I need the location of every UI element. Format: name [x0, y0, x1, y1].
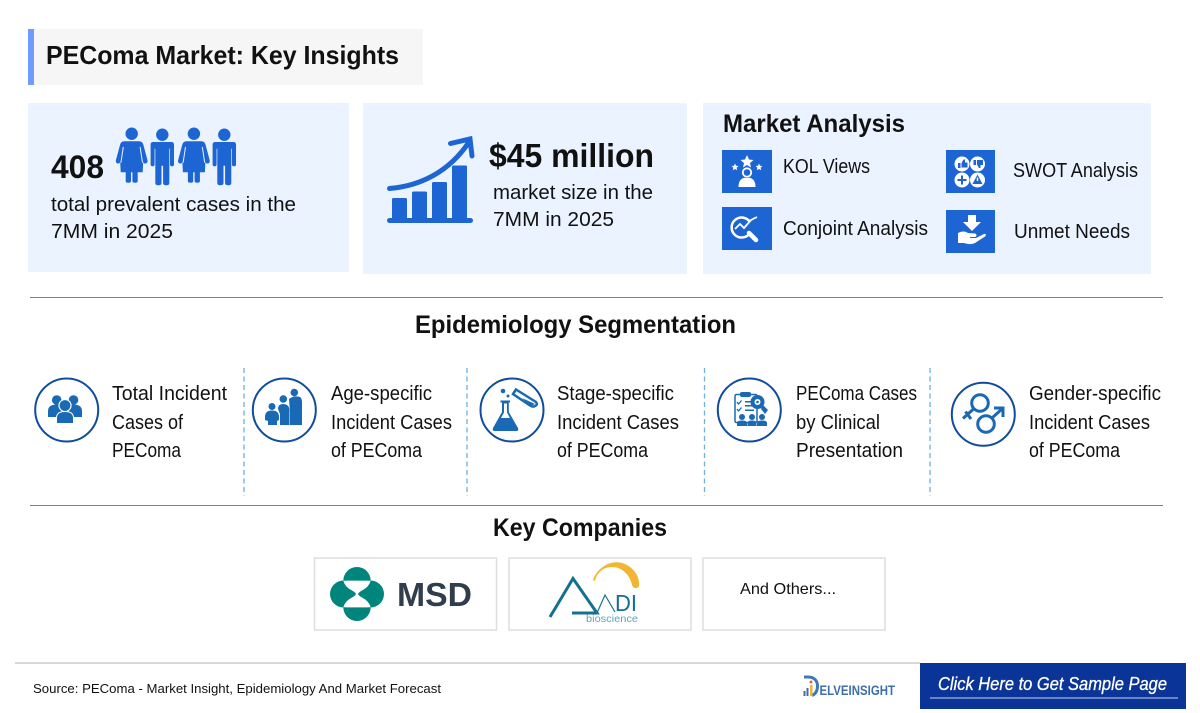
panel: market size — [363, 103, 687, 274]
text: market size description: market size in the — [493, 182, 653, 204]
icon: unmet needs — [946, 210, 995, 253]
button: get sample page: Click Here to Get Sample Page — [938, 674, 1167, 694]
text — [331, 383, 452, 462]
logo card: MSD: MSD — [397, 576, 472, 613]
text: of PEComa — [331, 440, 423, 462]
text: Stage-specific — [557, 383, 674, 405]
label: conjoint analysis: Conjoint Analysis — [783, 218, 928, 240]
text: prevalent cases description: total prevalent cases in the — [51, 194, 296, 216]
text: PEComa — [112, 440, 182, 462]
icon: KOL views — [722, 150, 772, 193]
text — [112, 383, 227, 462]
button: get sample page — [920, 663, 1186, 709]
text: of PEComa — [1029, 440, 1121, 462]
text: prevalent cases description: 7MM in 2025 — [51, 221, 173, 243]
segment: clinical presentation — [718, 378, 917, 462]
text: Total Incident — [112, 383, 227, 405]
panel: prevalent cases — [28, 103, 349, 272]
text: market size description — [493, 182, 653, 231]
logo card: and others: And Others... — [740, 581, 836, 598]
text: of PEComa — [557, 440, 649, 462]
label: unmet needs: Unmet Needs — [1014, 221, 1130, 243]
icon: age groups — [253, 378, 316, 442]
icon: people — [116, 128, 236, 185]
text: Presentation — [796, 440, 903, 462]
icon: conjoint analysis — [722, 207, 772, 250]
icon: growth chart — [387, 139, 473, 223]
source note: Source: PEComa - Market Insight, Epidemiology And Market Forecast — [33, 681, 441, 696]
icon: group of people — [35, 378, 98, 442]
heading: key companies: Key Companies — [493, 514, 667, 542]
heading: epidemiology segmentation: Epidemiology Segmentation — [415, 311, 736, 339]
text: Gender-specific — [1029, 383, 1161, 405]
logo: DelveInsight — [804, 677, 895, 698]
title: PEComa Market: Key Insights — [46, 40, 399, 70]
logo card: Aadi Bioscience: bioscience — [586, 613, 638, 625]
logo: DelveInsight: ELVEINSIGHT — [820, 682, 895, 698]
stat: $45 million: $45 million — [489, 137, 654, 174]
icon: clipboard and clinicians — [718, 378, 781, 442]
logo card: and others — [703, 558, 885, 630]
text — [1029, 383, 1161, 462]
segment: gender-specific — [952, 383, 1161, 462]
heading: market analysis: Market Analysis — [723, 110, 905, 138]
text: Incident Cases — [1029, 412, 1150, 434]
text — [557, 383, 679, 462]
text: market size description: 7MM in 2025 — [493, 209, 614, 231]
text: Incident Cases — [331, 412, 452, 434]
text: Incident Cases — [557, 412, 679, 434]
segment: stage-specific — [480, 378, 679, 462]
text: prevalent cases description — [51, 194, 296, 243]
segment: age-specific — [253, 378, 452, 462]
logo card: MSD — [314, 558, 496, 630]
logo card: Aadi Bioscience: DI — [615, 590, 637, 616]
label: SWOT analysis: SWOT Analysis — [1013, 160, 1138, 182]
segment: total incident cases — [35, 378, 227, 462]
text — [796, 383, 917, 462]
text: Age-specific — [331, 383, 432, 405]
panel: market analysis — [703, 103, 1151, 274]
title — [28, 29, 423, 85]
icon: lab flask — [480, 378, 544, 442]
label: KOL views: KOL Views — [783, 156, 870, 178]
icon: SWOT analysis — [946, 150, 995, 193]
icon: gender symbols — [952, 383, 1015, 446]
text: Cases of — [112, 412, 183, 434]
text: PEComa Cases — [796, 383, 917, 405]
stat: 408: 408 — [51, 149, 104, 185]
logo card: Aadi Bioscience — [509, 558, 691, 630]
text: by Clinical — [796, 412, 880, 434]
